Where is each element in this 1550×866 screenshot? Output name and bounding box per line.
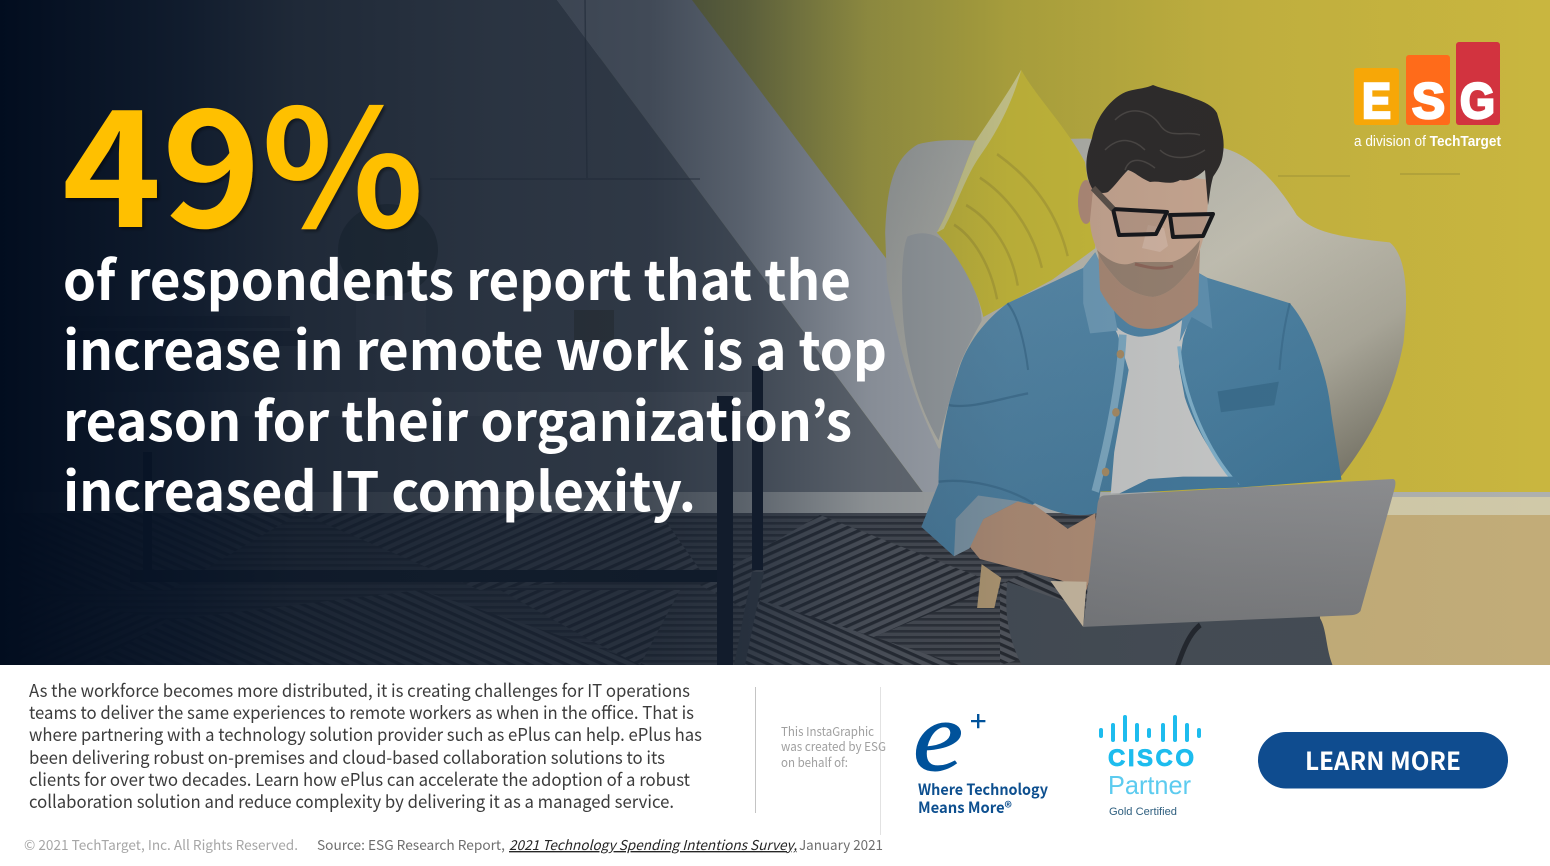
icon: cisco bars xyxy=(1101,717,1199,740)
headline sentence: increase in remote work is a top xyxy=(63,307,887,386)
skirting and floor xyxy=(226,492,1550,665)
attribution note: This InstaGraphic xyxy=(781,722,874,740)
logo bars xyxy=(1354,42,1500,125)
logo letters xyxy=(1362,73,1495,129)
attribution note: on behalf of: xyxy=(781,753,848,771)
gold certified: Gold Certified xyxy=(1109,806,1177,818)
body paragraph: As the workforce becomes more distributed, it is creating challenges for IT operations xyxy=(29,677,690,703)
body paragraph: been delivering robust on-premises and cloud-based collaboration solutions to its xyxy=(29,744,665,770)
denim shirt xyxy=(921,252,1341,556)
body xyxy=(921,252,1395,670)
headline sentence: reason for their organization’s xyxy=(63,378,852,457)
logo letters: S xyxy=(1412,73,1445,129)
concrete wall and angled light band xyxy=(147,0,941,492)
body paragraph: teams to deliver the same experiences to remote workers as when in the office. That is xyxy=(29,699,694,725)
body paragraph: where partnering with a technology solution provider such as ePlus can help. ePlus has xyxy=(29,721,702,747)
nose shadow and mouth xyxy=(1142,225,1168,252)
jeans xyxy=(1006,582,1335,670)
photo background: man with laptop in armchair xyxy=(0,0,1550,670)
logo letters: G xyxy=(1460,73,1495,129)
body paragraph: collaboration solution and reduce complexity by delivering it as a managed service. xyxy=(29,788,674,814)
Cisco Partner logo xyxy=(1101,717,1199,818)
headline sentence: of respondents report that the xyxy=(63,237,851,316)
body paragraph xyxy=(29,677,702,814)
dark navy left-to-right overlay xyxy=(0,0,1166,665)
logo tagline: a division of TechTarget xyxy=(1354,133,1501,150)
attribution note xyxy=(781,722,886,771)
placket and buttons xyxy=(1095,335,1123,492)
hair xyxy=(1086,85,1224,205)
partner word: Partner xyxy=(1108,770,1191,800)
headline statistic: 49%: 49% xyxy=(62,39,424,274)
white t-shirt xyxy=(1110,320,1228,494)
ePlus tagline xyxy=(918,778,1048,818)
ear xyxy=(1078,180,1094,224)
yellow pillow xyxy=(937,70,1095,317)
face xyxy=(1090,170,1208,264)
neck xyxy=(1098,245,1200,329)
stubble xyxy=(1097,240,1200,297)
ESG logo xyxy=(1354,42,1501,150)
collars xyxy=(1083,252,1118,333)
cisco wordmark: CISCO xyxy=(1108,745,1194,772)
table with plant, books and cup xyxy=(143,204,764,665)
armchair xyxy=(885,138,1406,476)
body paragraph: clients for over two decades. Learn how ePlus can accelerate the adoption of a robust xyxy=(29,766,690,792)
ePlus tagline: Means More® xyxy=(918,796,1012,818)
laptop xyxy=(1050,581,1087,627)
headline sentence xyxy=(63,237,887,527)
head xyxy=(1078,85,1224,329)
ePlus logo xyxy=(913,681,1048,818)
patterned rug xyxy=(0,513,1320,665)
forearm and hand xyxy=(970,501,1097,590)
icon: italic e with plus: e xyxy=(913,681,963,792)
breast pocket xyxy=(1218,382,1279,412)
attribution note: was created by ESG xyxy=(781,737,886,755)
learn more button: LEARN MORE xyxy=(1305,742,1461,778)
ePlus tagline: Where Technology xyxy=(918,778,1048,800)
copyright and source line: © 2021 TechTarget, Inc. All Rights Reserved. xyxy=(24,834,298,854)
copyright and source line: 2021 Technology Spending Intentions Survey, xyxy=(509,834,797,854)
man xyxy=(921,85,1395,670)
copyright and source line: January 2021 xyxy=(799,834,883,854)
white footer panel xyxy=(0,665,1550,866)
chair leg xyxy=(977,564,1001,608)
shirt hem xyxy=(1119,477,1240,493)
learn more button xyxy=(1258,732,1508,788)
glasses xyxy=(1113,209,1213,237)
yellow wall xyxy=(600,0,1550,500)
headline sentence: increased IT complexity. xyxy=(63,448,696,527)
copyright and source line xyxy=(24,834,883,854)
copyright and source line: Source: ESG Research Report, xyxy=(317,834,505,854)
logo letters: E xyxy=(1362,73,1391,129)
